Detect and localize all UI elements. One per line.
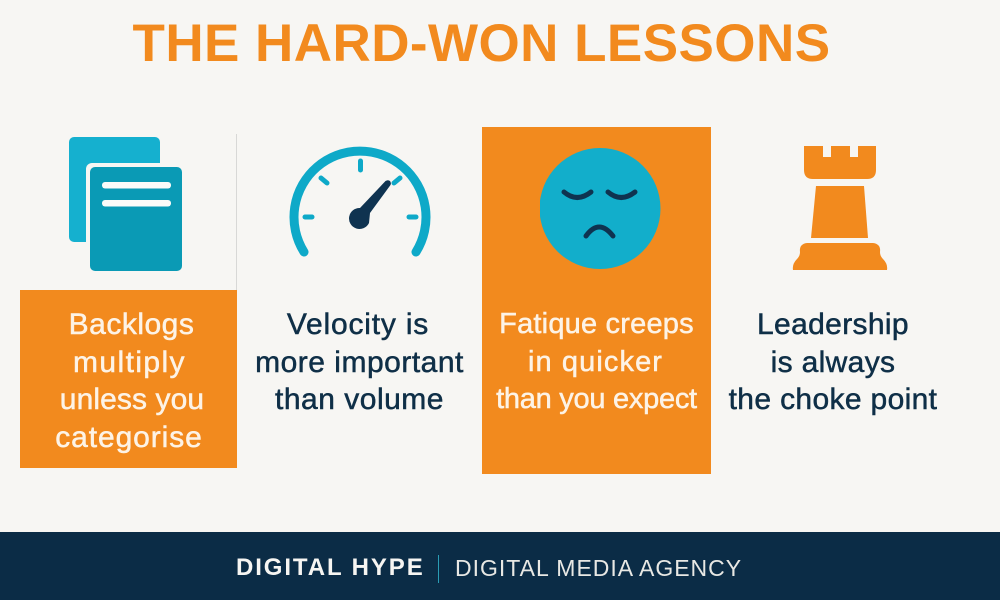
text: backlogs: categorise bbox=[55, 420, 203, 454]
text: backlogs: unless you bbox=[60, 383, 204, 416]
text: leadership: the choke point bbox=[729, 383, 937, 416]
icon: rook bbox=[792, 146, 888, 270]
text: backlogs: Backlogs bbox=[69, 308, 194, 341]
text: fatigue: Fatique creeps bbox=[499, 308, 694, 340]
brand: DIGITAL HYPE bbox=[236, 554, 425, 581]
text: velocity: Velocity is bbox=[287, 308, 429, 341]
panel: backlogs bbox=[20, 290, 237, 468]
icon: speedometer bbox=[290, 146, 430, 256]
text: fatigue: in quicker bbox=[528, 346, 663, 378]
text: leadership bbox=[728, 308, 937, 416]
footer bar bbox=[0, 532, 1000, 600]
footer divider bbox=[438, 555, 439, 583]
panel: fatigue bbox=[482, 127, 711, 474]
text: velocity: than volume bbox=[275, 383, 444, 416]
text: velocity bbox=[255, 308, 464, 416]
text: backlogs bbox=[55, 308, 204, 454]
icon: documents bbox=[69, 137, 182, 271]
text: fatigue bbox=[496, 308, 698, 415]
text: fatigue: than you expect bbox=[496, 383, 697, 415]
divider bbox=[236, 134, 237, 290]
text: velocity: more important bbox=[255, 346, 464, 378]
text: leadership: Leadership bbox=[757, 308, 909, 341]
title: THE HARD-WON LESSONS bbox=[132, 14, 830, 73]
icon: sad face bbox=[540, 148, 660, 269]
tagline: DIGITAL MEDIA AGENCY bbox=[455, 555, 742, 581]
text: leadership: is always bbox=[771, 346, 895, 378]
text: backlogs: multiply bbox=[73, 346, 186, 378]
